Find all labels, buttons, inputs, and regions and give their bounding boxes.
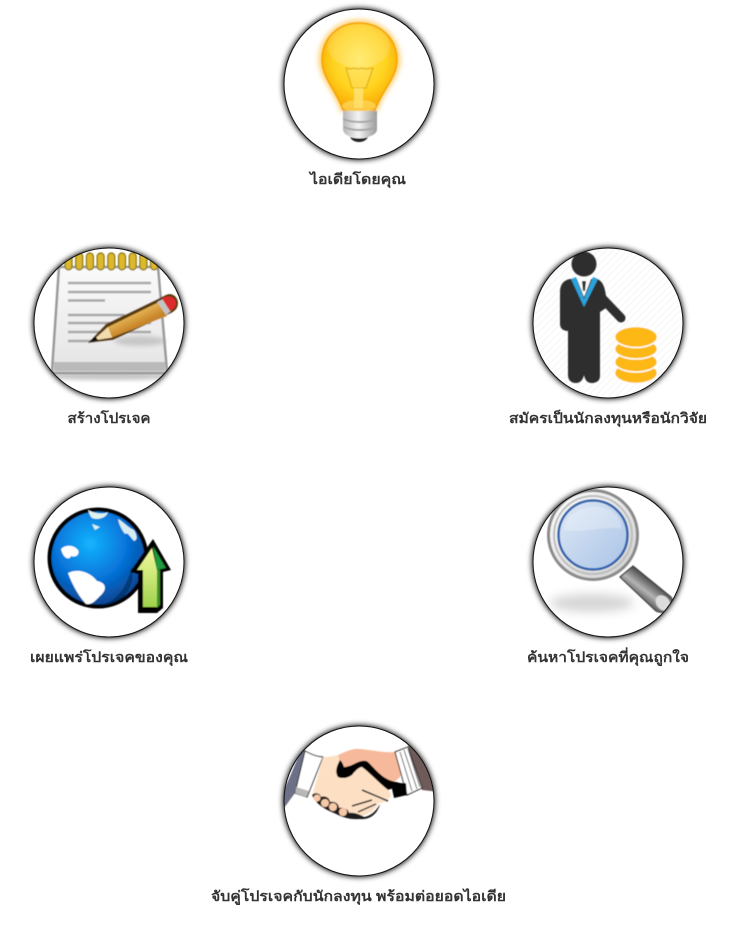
icon: handshake	[280, 745, 440, 819]
label: สมัครเป็นนักลงทุนหรือนักวิจัย	[509, 409, 707, 427]
step: match project with investor	[211, 725, 506, 905]
step: find a project you like	[527, 486, 689, 666]
icon: notepad and pencil	[41, 253, 178, 380]
label: สร้างโปรเจค	[68, 409, 150, 426]
icon: globe with upload arrow	[50, 510, 171, 613]
label: เผยแพร่โปรเจคของคุณ	[30, 648, 188, 666]
label: ไอเดียโดยคุณ	[308, 170, 406, 188]
step: create project	[33, 247, 185, 426]
step: idea by you	[283, 8, 435, 188]
icon: investor with coins	[560, 252, 658, 384]
step: publish your project	[30, 486, 188, 666]
step: sign up as investor or researcher	[509, 247, 707, 427]
label: ค้นหาโปรเจคที่คุณถูกใจ	[527, 647, 689, 666]
label: จับคู่โปรเจคกับนักลงทุน พร้อมต่อยอดไอเดีย	[211, 887, 506, 905]
icon: light bulb	[318, 19, 401, 142]
icon: magnifying glass	[548, 490, 673, 614]
